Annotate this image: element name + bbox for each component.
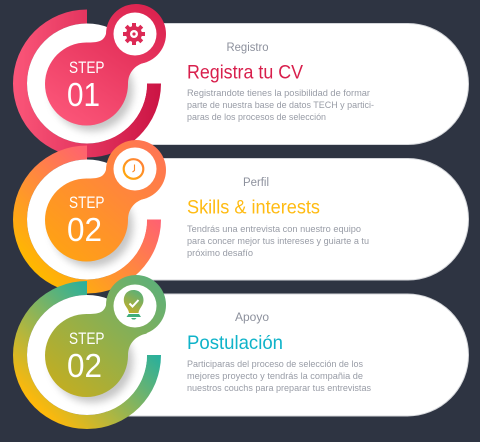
step number: step 3: 02 xyxy=(67,347,102,384)
card: step 1 xyxy=(70,24,468,144)
badge: step 3 xyxy=(45,275,166,397)
white disc: step 1 xyxy=(27,24,147,144)
heading: skills & interests: Skills & interests xyxy=(187,196,320,218)
panel: step 1 xyxy=(13,4,468,158)
text block: step 1: parte de nuestra base de datos TECH y partici- xyxy=(187,100,374,110)
card: step 2 xyxy=(70,158,468,280)
panel: step 2 xyxy=(13,140,468,294)
text block: step 3: nuestros couchs para preparar tus entrevistas xyxy=(187,383,372,393)
white disc: step 3 xyxy=(27,295,147,415)
step label: step 2: STEP xyxy=(69,194,104,212)
text block: step 1: paras de los procesos de selección xyxy=(187,112,326,122)
step label: step 3: STEP xyxy=(69,330,104,348)
ring: step 3 xyxy=(13,281,161,429)
disc shadow: step 2 xyxy=(51,185,133,267)
panel: step 3 xyxy=(13,275,468,429)
badge: step 2 xyxy=(45,140,166,262)
text block: step 2 xyxy=(187,224,369,258)
text block: step 2: próximo desafío xyxy=(187,248,253,258)
label: perfil: Perfil xyxy=(243,177,269,189)
ring: step 1 xyxy=(13,10,161,158)
icon: clock xyxy=(114,148,156,190)
step label: step 1: STEP xyxy=(69,59,104,77)
text block: step 3 xyxy=(187,359,372,393)
card: step 3 xyxy=(70,294,468,416)
icon: light bulb xyxy=(114,284,156,328)
step number: step 2: 02 xyxy=(67,211,102,248)
heading: postulación: Postulación xyxy=(187,332,283,354)
disc shadow: step 3 xyxy=(51,320,133,402)
heading: registra tu cv: Registra tu CV xyxy=(187,62,303,84)
step number: step 1: 01 xyxy=(67,76,100,113)
text block: step 2: Tendrás una entrevista con nuestro equipo xyxy=(187,224,361,234)
text block: step 1: Registrandote tienes la posibilidad de formar xyxy=(187,88,370,98)
text block: step 2: para concer mejor tus intereses y guiarte a tu xyxy=(187,236,369,246)
badge: step 1 xyxy=(45,4,166,126)
text block: step 3: mejores proyecto y tendrás la compañia de xyxy=(187,371,363,381)
text block: step 3: Participaras del proceso de selección de los xyxy=(187,359,363,369)
text block: step 1 xyxy=(187,88,374,122)
disc shadow: step 1 xyxy=(51,49,133,131)
label: apoyo: Apoyo xyxy=(235,312,269,324)
ring: step 2 xyxy=(13,146,161,294)
label: registro: Registro xyxy=(226,42,268,54)
icon: gear xyxy=(114,12,156,56)
white disc: step 2 xyxy=(27,160,147,280)
